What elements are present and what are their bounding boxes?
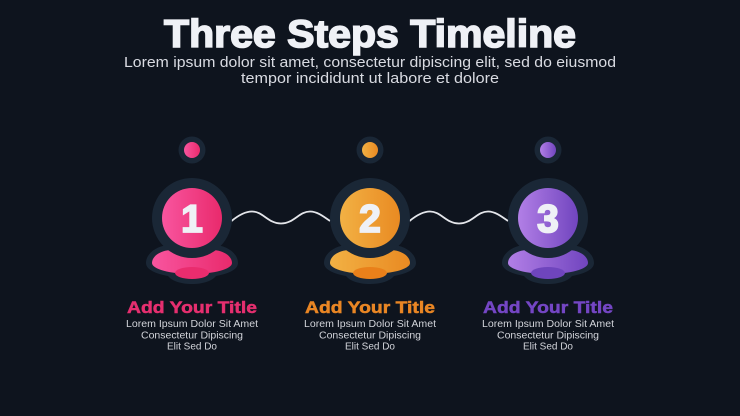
step 2 marker [324, 136, 416, 284]
numbered circle 3 [508, 178, 588, 258]
numbered circle 2: 2 [359, 198, 381, 241]
subtitle [124, 55, 616, 87]
step 1 body: Consectetur Dipiscing [141, 330, 243, 342]
step 3 body [482, 319, 614, 352]
step 2 body: Lorem Ipsum Dolor Sit Amet [304, 319, 436, 330]
step 1 text [126, 298, 258, 352]
step 2 body [304, 319, 436, 352]
step 1 body: Lorem Ipsum Dolor Sit Amet [126, 319, 258, 330]
numbered circle 2 [330, 178, 410, 258]
base 3 [502, 245, 594, 284]
step 2 body: Consectetur Dipiscing [319, 330, 421, 342]
step 1 marker [146, 136, 238, 284]
step 3 text [482, 298, 614, 352]
base 2 [324, 245, 416, 284]
connector: step 1 to 2 [232, 212, 330, 224]
small dot 3 [534, 136, 562, 164]
small dot 1 [178, 136, 206, 164]
step 2 text [304, 298, 436, 352]
numbered circle 3: 3 [537, 198, 559, 241]
numbered circle 1: 1 [181, 198, 203, 241]
title: Three Steps Timeline [164, 13, 576, 56]
step 3 heading: Add Your Title [483, 298, 613, 317]
numbered circle 1 [152, 178, 232, 258]
step 1 heading: Add Your Title [127, 298, 257, 317]
small dot 2 [356, 136, 384, 164]
subtitle: tempor incididunt ut labore et dolore [241, 71, 499, 87]
step 2 heading: Add Your Title [305, 298, 435, 317]
step 3 body: Lorem Ipsum Dolor Sit Amet [482, 319, 614, 330]
connector: step 2 to 3 [410, 212, 508, 224]
step 1 body: Elit Sed Do [167, 342, 217, 352]
step 1 body [126, 319, 258, 352]
step 3 body: Elit Sed Do [523, 342, 573, 352]
step 2 body: Elit Sed Do [345, 342, 395, 352]
subtitle: Lorem ipsum dolor sit amet, consectetur dipiscing elit, sed do eiusmod [124, 55, 616, 71]
step 3 marker [502, 136, 594, 284]
step 3 body: Consectetur Dipiscing [497, 330, 599, 342]
base 1 [146, 245, 238, 284]
